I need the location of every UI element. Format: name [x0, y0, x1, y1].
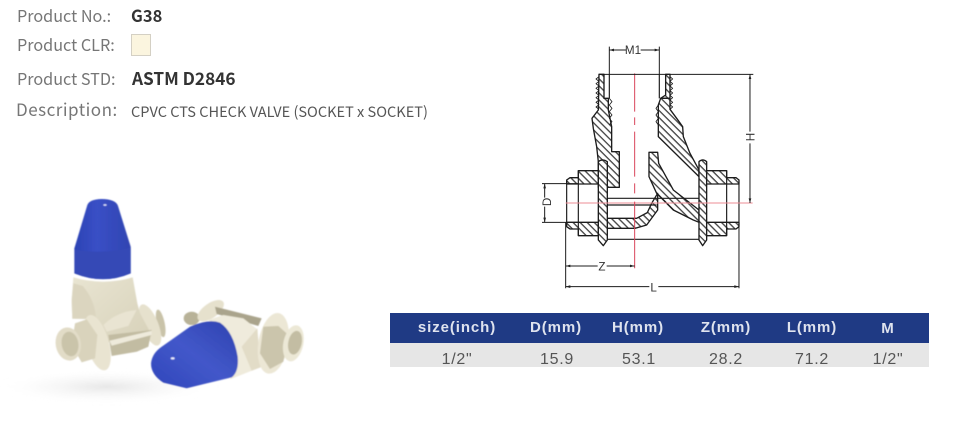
table header: Z(mm): [701, 319, 751, 336]
thread teeth: [596, 77, 673, 125]
cream body: [72, 277, 152, 351]
label: product colour: Product CLR:: [17, 32, 115, 56]
dimension labels: [541, 44, 757, 295]
floor shadow: [0, 368, 220, 405]
value: product standard: ASTM D2846: [132, 65, 236, 90]
value: description: CPVC CTS CHECK VALVE (SOCKET x SOCKET): [131, 101, 428, 122]
hex nut: [72, 319, 97, 362]
table row: 15.9: [540, 351, 574, 368]
label: product number: Product No.:: [17, 3, 111, 27]
table row: 71.2: [795, 351, 829, 368]
socket end: [53, 325, 84, 363]
dimension labels: M1: [625, 44, 641, 57]
table header: [390, 313, 929, 343]
technical drawing: valve cross section: [541, 44, 757, 295]
connecting tube: [215, 307, 262, 326]
value: product number: G38: [131, 3, 162, 27]
swatch: product colour: [131, 34, 151, 56]
product photo: two check valves: [0, 199, 307, 405]
dimension labels: Z: [598, 261, 606, 274]
specification table: [390, 313, 929, 368]
rear socket: [184, 312, 200, 325]
hex nut: [260, 326, 288, 369]
socket end: [280, 323, 307, 363]
front flange: [79, 312, 116, 373]
table row: 1/2": [873, 351, 903, 368]
rear flange: [134, 301, 166, 349]
dimension labels: H: [744, 133, 757, 141]
table header: size(inch): [418, 319, 496, 336]
dimension arrows: [543, 49, 751, 288]
dimension labels: D: [541, 198, 554, 206]
label: product standard: Product STD:: [17, 66, 115, 90]
hatched valve body sections: [567, 74, 739, 246]
table row: 28.2: [709, 351, 743, 368]
dimension labels: L: [650, 282, 657, 295]
label: description: Description:: [16, 96, 118, 121]
table row: 53.1: [622, 351, 656, 368]
table header: D(mm): [530, 319, 582, 336]
rear flange: [194, 296, 227, 325]
table header: H(mm): [612, 319, 664, 336]
table row: [390, 343, 929, 368]
lower body of lying valve: [184, 296, 307, 379]
blue cap: [74, 199, 131, 279]
table header: L(mm): [787, 319, 837, 336]
connecting tube: [108, 330, 152, 356]
internal bore and pipe lines: [567, 74, 739, 239]
dimension lines: [542, 47, 753, 288]
lying valve: [151, 296, 307, 388]
front flange: [253, 311, 293, 376]
table header: M: [881, 320, 895, 337]
blue cap: [151, 321, 238, 388]
upright valve: [53, 199, 167, 373]
table row: 1/2": [442, 351, 472, 368]
rear socket: [154, 309, 167, 338]
red centre lines: [566, 73, 753, 268]
lower body of upright valve: [53, 277, 167, 373]
cream body: [208, 315, 259, 379]
